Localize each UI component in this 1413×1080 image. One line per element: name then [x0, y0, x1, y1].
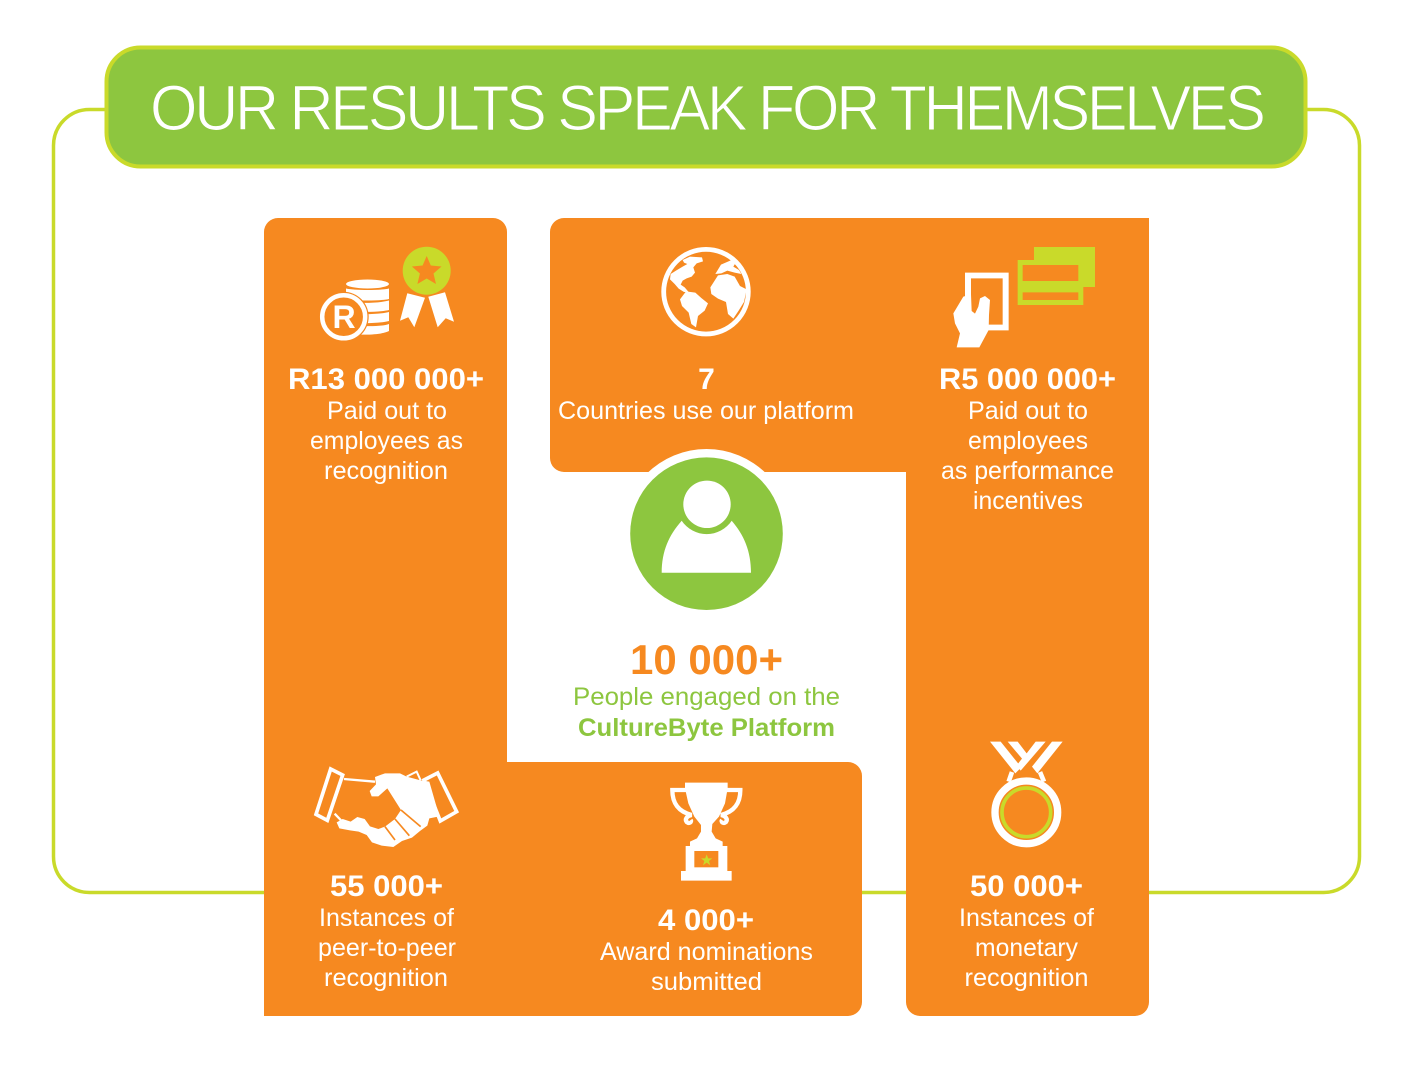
- icon: coins and rosette: R: [332, 299, 356, 335]
- stat: performance incentives: [939, 247, 1116, 515]
- description: employees as: [310, 427, 463, 455]
- stat: recognition payout: [288, 247, 484, 485]
- description: employees: [968, 427, 1088, 455]
- icon: trophy: [672, 783, 740, 881]
- description: People engaged on the: [573, 683, 840, 711]
- title: OUR RESULTS SPEAK FOR THEMSELVES: [150, 73, 1266, 144]
- icon: person in green circle: [622, 449, 792, 619]
- description: recognition: [324, 457, 448, 485]
- description: Paid out to: [327, 397, 447, 425]
- icon: handshake: [316, 769, 457, 847]
- description: recognition: [964, 964, 1088, 992]
- value: R5 000 000+: [939, 363, 1116, 396]
- icon: medal: [990, 742, 1063, 844]
- description: as performance: [941, 457, 1114, 485]
- icon: coins and rosette: [319, 247, 454, 342]
- description: Paid out to: [968, 397, 1088, 425]
- value: 50 000+: [970, 870, 1083, 903]
- description: [318, 904, 456, 992]
- value: 55 000+: [330, 870, 443, 903]
- description: [573, 683, 840, 742]
- description: recognition: [324, 964, 448, 992]
- icon: globe: [664, 249, 748, 334]
- description: submitted: [651, 968, 762, 996]
- description: [941, 397, 1114, 515]
- description: CultureByte Platform: [578, 714, 835, 742]
- panel: right orange shape: [550, 218, 1149, 1016]
- value: R13 000 000+: [288, 363, 484, 396]
- panel: left orange L shape: [264, 218, 862, 1016]
- icon: hand holding card with banknotes: [953, 247, 1095, 347]
- description: incentives: [973, 487, 1083, 515]
- stat: peer recognition: [316, 769, 457, 992]
- stat: people engaged: [573, 449, 840, 742]
- value: 10 000+: [630, 636, 783, 683]
- outer frame: [54, 110, 1360, 892]
- description: peer-to-peer: [318, 934, 456, 962]
- description: monetary: [975, 934, 1078, 962]
- title banner: [106, 48, 1306, 166]
- stat: award nominations: [600, 783, 813, 996]
- stat: monetary recognition: [959, 742, 1094, 992]
- description: Instances of: [959, 904, 1094, 932]
- description: Countries use our platform: [558, 397, 854, 425]
- description: Instances of: [319, 904, 454, 932]
- description: Award nominations: [600, 938, 813, 966]
- value: 7: [698, 363, 715, 396]
- description: [310, 397, 463, 485]
- stat: countries: [558, 249, 854, 425]
- value: 4 000+: [658, 904, 754, 937]
- description: [959, 904, 1094, 992]
- description: [600, 938, 813, 996]
